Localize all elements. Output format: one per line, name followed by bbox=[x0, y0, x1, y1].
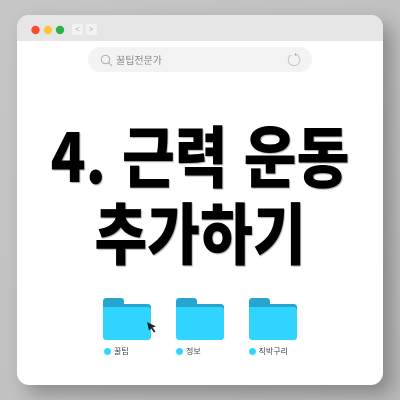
back button: < bbox=[75, 25, 80, 34]
forward button: > bbox=[89, 25, 93, 34]
search bar bbox=[88, 47, 312, 72]
folder: 정보 bbox=[176, 298, 224, 340]
back button bbox=[72, 24, 83, 35]
title line 1: 4. 근력 운동 bbox=[51, 105, 349, 202]
label dot 2 bbox=[176, 348, 183, 355]
label: 꿀팁: 꿀팁 bbox=[114, 346, 129, 357]
icon: reload bbox=[288, 53, 300, 66]
label dot 3 bbox=[248, 348, 256, 355]
label: 정보: 정보 bbox=[186, 346, 201, 357]
traffic lights bbox=[31, 26, 64, 34]
search text: 꿀팁전문가 bbox=[116, 52, 162, 67]
icon: cursor bbox=[147, 322, 156, 332]
folder: 직박구리 bbox=[249, 298, 297, 340]
title line 2: 추가하기 bbox=[94, 182, 306, 279]
label dot 1 bbox=[104, 348, 111, 355]
label: 직박구리: 직박구리 bbox=[258, 346, 288, 357]
folder: 꿀팁 bbox=[103, 298, 151, 340]
forward button bbox=[86, 24, 96, 35]
top bar bbox=[17, 15, 383, 41]
icon: search bbox=[100, 54, 112, 66]
